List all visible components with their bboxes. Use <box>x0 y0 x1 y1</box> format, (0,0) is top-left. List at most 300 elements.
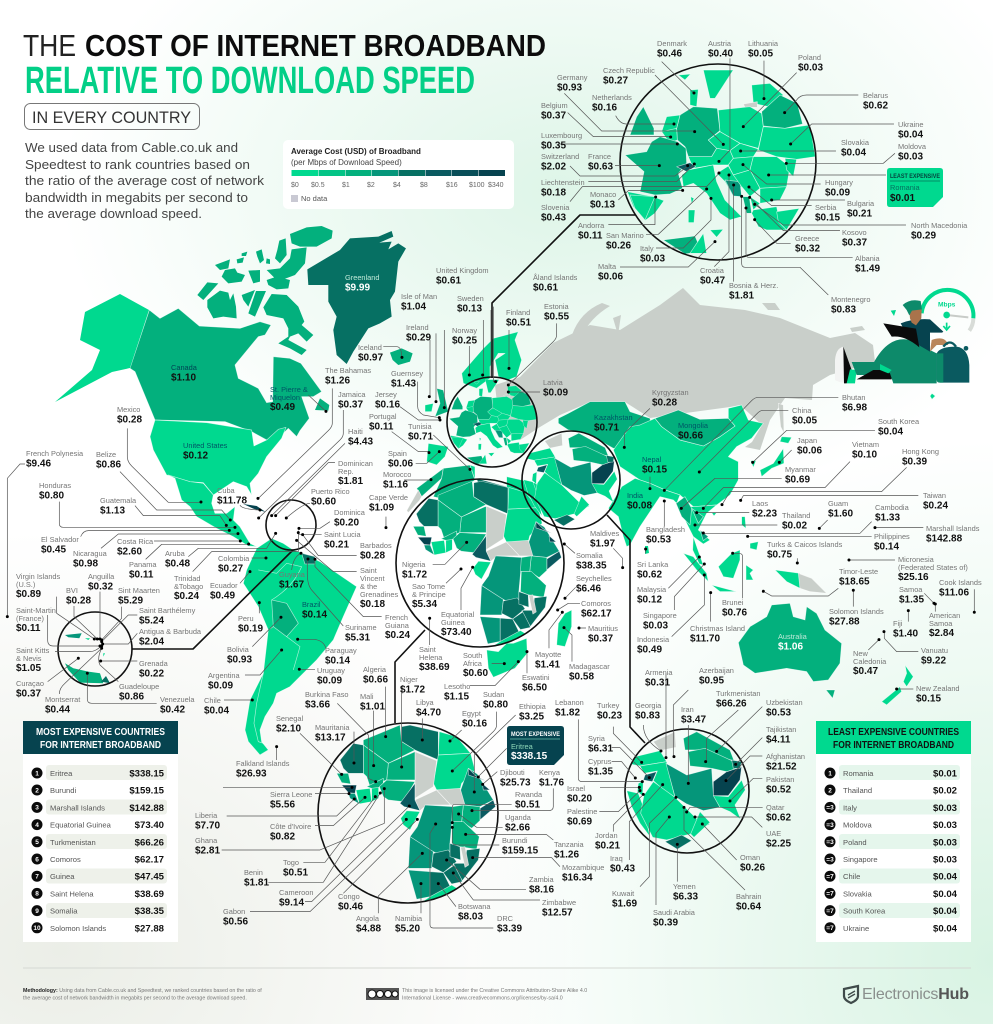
label: Saint Vincent and the Grenadines: Grenadines <box>360 590 399 599</box>
label: Cameroon: Cameroon <box>279 888 314 897</box>
label: Uruguay: Uruguay <box>317 666 345 675</box>
label: Peru: $0.19 <box>238 624 263 634</box>
label: China: China <box>792 406 811 415</box>
panel: most expensive countries table: $38.35 <box>135 906 165 917</box>
label: United Kingdom: $0.61 <box>436 276 461 286</box>
label: Zambia: $8.16 <box>529 884 554 896</box>
panel: least expensive countries table: =7 <box>826 874 834 880</box>
label: Uruguay: $0.09 <box>317 676 342 686</box>
label: American Samoa: American <box>929 611 960 620</box>
label: Italy: Italy <box>640 244 654 253</box>
label: Saudi Arabia: $0.39 <box>653 918 678 928</box>
label: Turkmenistan: $66.26 <box>716 698 747 710</box>
label: Thailand: Thailand <box>782 511 810 520</box>
label: Panama: Panama <box>129 560 157 569</box>
label: DRC: DRC <box>497 914 513 923</box>
label: New Caledonia: $0.47 <box>853 666 878 677</box>
panel: most expensive countries table: $27.88 <box>135 923 165 934</box>
panel: least expensive countries table: $0.04 <box>933 906 958 917</box>
label: Haiti: Haiti <box>348 427 363 436</box>
panel: most expensive countries table: Comoros <box>50 855 81 864</box>
label: Burundi: $159.15 <box>502 846 539 856</box>
label: Brazil: Brazil <box>302 600 320 609</box>
label: Cape Verde: $1.09 <box>369 502 394 514</box>
map: Northern Europe <box>462 332 522 388</box>
callout: most expensive Eritrea: $338.15 <box>511 751 548 762</box>
label: Montserrat: $0.44 <box>45 704 70 716</box>
label: Brunei: $0.76 <box>722 608 747 618</box>
label: Isle of Man: Isle of Man <box>401 292 437 301</box>
label: Singapore: Singapore <box>643 611 677 620</box>
label: Suriname: $5.31 <box>345 632 370 644</box>
label: Armenia: $0.31 <box>645 678 670 688</box>
label: Togo: $0.51 <box>283 868 308 878</box>
label: Bahrain: Bahrain <box>736 892 761 901</box>
label: Equatorial Guinea: Equatorial <box>441 610 474 619</box>
label: Seychelles: $6.46 <box>576 584 601 594</box>
label: Comoros: Comoros <box>581 599 611 608</box>
map: Middle East small <box>524 433 617 526</box>
label: Turks and Caicos Islands: Turks & Caicos Islands <box>767 540 842 549</box>
panel: least expensive countries table: =7 <box>826 891 834 898</box>
label: Syria: Syria <box>588 734 605 743</box>
label: Turkmenistan: Turkmenistan <box>716 689 760 698</box>
world map <box>55 226 935 755</box>
label: Rwanda: Rwanda <box>515 790 542 799</box>
label: Pakistan: $0.52 <box>766 784 791 796</box>
label: Uzbekistan: Uzbekistan <box>766 698 803 707</box>
label: Argentina: Argentina <box>208 671 240 680</box>
label: Ukraine: Ukraine <box>898 120 923 129</box>
label: Eswatini: $6.50 <box>522 682 547 694</box>
label: New Zealand: New Zealand <box>916 684 960 693</box>
panel: most expensive countries table: Saint Helena <box>50 889 94 898</box>
panel: most expensive countries table: Burundi <box>50 786 76 795</box>
logo: ElectronicsHub: ElectronicsHub <box>862 986 969 1003</box>
panel: most expensive countries table: 7 <box>35 874 39 880</box>
intro text <box>25 140 265 221</box>
label: Mali: $1.01 <box>360 702 385 712</box>
label: Guernsey: Guernsey <box>391 369 423 378</box>
label: Cote d'Ivoire: $0.82 <box>270 832 295 842</box>
label: Liechtenstein: $0.18 <box>541 188 566 198</box>
label: Liberia: Liberia <box>195 811 217 820</box>
label: Gabon: $0.56 <box>223 916 248 928</box>
label: Iraq: $0.43 <box>610 864 635 874</box>
label: Iraq: Iraq <box>610 854 623 863</box>
label: Guyana: Guyana <box>279 570 305 579</box>
label: Serbia: Serbia <box>815 203 836 212</box>
label: Kazakhstan: $0.71 <box>594 422 619 434</box>
label: Armenia: Armenia <box>645 668 673 677</box>
leader lines: Middle East inset <box>578 673 763 905</box>
panel: least expensive countries table <box>816 721 971 942</box>
label: Kyrgyzstan: $0.28 <box>652 398 677 408</box>
label: Sierra Leone: $5.56 <box>270 800 295 810</box>
panel: least expensive countries table: =7 <box>826 908 834 915</box>
panel: most expensive countries table: 1 <box>35 770 39 777</box>
panel: most expensive countries table: 10 <box>33 925 41 932</box>
label: South Africa: South <box>463 651 482 660</box>
label: Uganda: Uganda <box>505 813 531 822</box>
panel: most expensive countries table: Marshall Islands <box>50 803 105 812</box>
map: Alaska <box>55 294 149 402</box>
legend: $8 <box>420 182 428 189</box>
label: Denmark: $0.46 <box>657 48 682 60</box>
label: Seychelles: Seychelles <box>576 574 612 583</box>
label: Angola: Angola <box>356 914 379 923</box>
label: French Guiana: $0.24 <box>385 630 410 641</box>
label: Qatar: Qatar <box>766 803 784 812</box>
label: Switzerland: $2.02 <box>541 162 566 172</box>
legend <box>283 140 514 209</box>
label: DRC: $3.39 <box>497 924 522 934</box>
illustration: person with laptop and speed gauge <box>835 290 973 383</box>
label: BVI: BVI <box>66 586 78 595</box>
label: Senegal: Senegal <box>276 714 303 723</box>
label: Latvia: Latvia <box>543 378 563 387</box>
label: Canada: Canada <box>171 363 197 372</box>
map: Russia (no data) <box>495 288 875 450</box>
label: Anguilla: Anguilla <box>88 572 114 581</box>
label: Guyana: $1.67 <box>279 580 304 590</box>
label: Nicaragua: $0.98 <box>73 558 98 570</box>
label: Latvia: $0.09 <box>543 388 568 398</box>
leader lines: Africa and Western Europe <box>392 330 664 686</box>
map: Arctic Russian islands <box>572 303 865 336</box>
label: India: India <box>627 491 643 500</box>
intro text: the ratio of the average cost of network <box>25 173 265 188</box>
panel: most expensive countries table: 9 <box>35 908 39 915</box>
label: Nepal: Nepal <box>642 455 661 464</box>
map: Kazakhstan, Mongolia and Asia <box>558 402 652 448</box>
label: Trinidad and Tobago: $0.24 <box>174 591 199 602</box>
label: Angola: $4.88 <box>356 924 381 934</box>
label: Tunisia: Tunisia <box>408 422 432 431</box>
label: Finland: Finland <box>506 308 530 317</box>
label: Andorra: Andorra <box>578 221 604 230</box>
label: Bhutan: Bhutan <box>842 393 865 402</box>
label: Guatemala: $1.13 <box>100 506 125 516</box>
panel: most expensive countries table: 8 <box>35 891 39 898</box>
label: Portugal: Portugal <box>369 412 397 421</box>
label: New Caledonia: Caledonia <box>853 657 887 666</box>
label: Mauritania: Mauritania <box>315 723 350 732</box>
panel: most expensive countries table: $38.69 <box>135 889 164 900</box>
label: Christmas Island: Christmas Island <box>690 624 745 633</box>
label: Monaco: $0.13 <box>590 200 615 210</box>
label: Yemen: $6.33 <box>673 892 698 902</box>
label: Croatia: Croatia <box>700 266 724 275</box>
label: Morocco: $1.16 <box>383 480 408 490</box>
label: North Macedonia: North Macedonia <box>911 221 967 230</box>
label: Hong Kong: $0.39 <box>902 456 927 468</box>
panel: least expensive countries table: $0.03 <box>933 854 957 866</box>
label: Senegal: $2.10 <box>276 724 301 734</box>
label: Bolivia: $0.93 <box>227 654 252 666</box>
label: Spain: $0.06 <box>388 458 413 470</box>
panel: least expensive countries table: $0.03 <box>933 837 957 848</box>
label: Falkland Islands: Falkland Islands <box>236 759 289 768</box>
label: Jordan: Jordan <box>595 831 618 840</box>
label: Sri Lanka: $0.62 <box>637 570 662 580</box>
label: Slovakia: $0.04 <box>841 148 866 158</box>
heading: least expensive: LEAST EXPENSIVE COUNTRIES <box>828 726 959 738</box>
label: Philippines: Philippines <box>874 532 910 541</box>
label: Turks and Caicos Islands: $0.75 <box>767 550 792 560</box>
label: Isle of Man: $1.04 <box>401 302 426 312</box>
label: Virgin Islands: $0.89 <box>16 589 41 600</box>
panel: most expensive countries table: Equatorial Guinea <box>50 821 112 830</box>
label: Germany: $0.93 <box>557 82 582 94</box>
panel: most expensive countries table: $159.15 <box>129 786 165 796</box>
label: Dominican Republic: Rep. <box>338 467 354 476</box>
label: Vanuatu: Vanuatu <box>921 646 948 655</box>
label: Argentina: $0.09 <box>208 680 233 692</box>
panel: least expensive countries table: $0.02 <box>933 786 957 796</box>
label: Serbia: $0.15 <box>815 212 840 224</box>
panel: least expensive countries table: Moldova <box>843 821 872 830</box>
legend: $16 <box>446 182 458 189</box>
label: Eswatini: Eswatini <box>522 673 550 682</box>
label: Saint Lucia: $0.21 <box>324 540 349 550</box>
label: Ukraine: $0.04 <box>898 130 923 140</box>
label: Mozambique: $16.34 <box>562 872 593 884</box>
label: Botswana: $8.03 <box>458 912 483 922</box>
label: Azerbaijan: Azerbaijan <box>699 666 734 675</box>
label: Spain: Spain <box>388 449 407 458</box>
methodology <box>23 988 262 1002</box>
label: French Guiana: French <box>385 613 408 622</box>
panel: least expensive countries table: =3 <box>826 856 834 863</box>
label: Anguilla: $0.32 <box>88 582 113 592</box>
label: Lithuania: Lithuania <box>748 39 778 48</box>
label: Timor-Leste: $18.65 <box>839 576 870 588</box>
leader lines: Americas <box>7 347 402 760</box>
label: Hungary: Hungary <box>825 178 853 187</box>
label: Mozambique: Mozambique <box>562 863 604 872</box>
label: Ethiopia: Ethiopia <box>519 702 546 711</box>
map: Africa north and south edges <box>407 465 572 677</box>
callout: least expensive Romania: LEAST EXPENSIVE <box>890 173 940 180</box>
label: Japan: $0.06 <box>797 446 822 456</box>
label: Ireland: Ireland <box>406 323 429 332</box>
label: Iran: $3.47 <box>681 714 706 726</box>
intro text: the average download speed. <box>25 206 202 221</box>
label: Botswana: Botswana <box>458 902 490 911</box>
country labels: Asia and Oceania <box>590 388 982 704</box>
label: South Africa: Africa <box>463 659 483 668</box>
panel: least expensive countries table: South Korea <box>843 907 886 916</box>
label: Marshall Islands: Marshall Islands <box>926 524 979 533</box>
label: Monaco: Monaco <box>590 190 616 199</box>
panel: least expensive countries table: $0.04 <box>933 889 958 900</box>
methodology: the average cost of network bandwidth in megabits per second to the average download speed. <box>23 996 247 1002</box>
label: Sint Maarten: $5.29 <box>118 596 143 606</box>
inset: Europe <box>620 64 816 260</box>
label: Greece: $0.32 <box>795 244 820 254</box>
label: Philippines: $0.14 <box>874 542 899 552</box>
label: Albania: Albania <box>855 254 880 263</box>
label: Greenland: Greenland <box>345 273 380 282</box>
map: Africa small <box>413 481 561 648</box>
label: Malta: Malta <box>598 262 616 271</box>
heading: most expensive: MOST EXPENSIVE COUNTRIES <box>36 726 165 738</box>
label: Burkina Faso: Burkina Faso <box>305 690 349 699</box>
label: Mongolia: $0.66 <box>678 430 703 442</box>
label: Australia: Australia <box>778 632 807 641</box>
label: Colombia: $0.27 <box>218 564 243 574</box>
label: Dominica: Dominica <box>334 508 365 517</box>
label: Bhutan: $6.98 <box>842 402 867 414</box>
label: Saint Vincent and the Grenadines: & the <box>360 582 377 591</box>
label: Andorra: $0.11 <box>578 230 603 242</box>
label: Timor-Leste: Timor-Leste <box>839 567 878 576</box>
label: Puerto Rico: $0.60 <box>311 496 336 508</box>
label: Solomon Islands: $27.88 <box>829 616 860 628</box>
label: Malaysia: $0.12 <box>637 594 662 606</box>
label: Mongolia: Mongolia <box>678 421 708 430</box>
label: Panama: $0.11 <box>129 570 154 580</box>
label: Maldives: Maldives <box>590 529 619 538</box>
label: Maldives: $1.97 <box>590 538 615 550</box>
label: Sao Tome and Principe: Sao Tome <box>412 582 445 591</box>
label: Lesotho: $1.15 <box>444 692 469 702</box>
subtitle: RELATIVE TO DOWNLOAD SPEED <box>25 60 475 102</box>
panel: least expensive countries table: 2 <box>828 787 832 794</box>
license text: International License - www.creativecommons.org/licenses/by-sa/4.0 <box>402 996 563 1002</box>
label: UAE: $2.25 <box>766 838 791 850</box>
label: Sudan: $0.80 <box>483 700 508 710</box>
panel: least expensive countries table: Ukraine <box>843 924 869 933</box>
label: Laos: Laos <box>752 499 768 508</box>
label: French Polynesia: $9.46 <box>26 458 51 470</box>
label: Comoros: $62.17 <box>581 608 612 620</box>
label: Saint Kitts and Nevis: $1.05 <box>16 663 41 674</box>
icon: backpack <box>937 342 969 383</box>
label: Kazakhstan: Kazakhstan <box>594 413 633 422</box>
heading: most expensive <box>23 721 178 754</box>
label: Tajikistan: $4.11 <box>766 734 791 746</box>
label: North Macedonia: $0.29 <box>911 230 936 242</box>
panel: least expensive countries table: $0.04 <box>933 872 958 883</box>
label: Iran: Iran <box>681 705 694 714</box>
label: Guam: $1.60 <box>828 508 853 520</box>
label: El Salvador: El Salvador <box>41 535 79 544</box>
label: Palestine: $0.69 <box>567 816 592 828</box>
label: Antigua and Barbuda: Antigua & Barbuda <box>139 627 201 636</box>
label: Gabon: Gabon <box>223 907 245 916</box>
label: Australia: $1.06 <box>778 642 803 652</box>
label: Guatemala: Guatemala <box>100 496 136 505</box>
legend: $340 <box>488 182 504 189</box>
label: Lesotho: Lesotho <box>444 682 470 691</box>
label: Barbados: $0.28 <box>360 550 385 562</box>
inset: Caribbean <box>58 612 132 686</box>
label: Christmas Island: $11.70 <box>690 634 720 644</box>
label: Colombia: Colombia <box>218 554 249 563</box>
label: Paraguay: $0.14 <box>325 656 350 666</box>
panel: least expensive countries table: 1 <box>828 770 832 777</box>
label: Saint Lucia: Saint Lucia <box>324 530 361 539</box>
label: Sint Maarten: Sint Maarten <box>118 586 160 595</box>
label: El Salvador: $0.45 <box>41 544 66 556</box>
label: Togo: Togo <box>283 858 299 867</box>
label: Antigua and Barbuda: $2.04 <box>139 636 164 648</box>
panel: least expensive countries table: =3 <box>826 822 834 829</box>
label: Cambodia: $1.33 <box>875 512 900 524</box>
label: Czech Republic: Czech Republic <box>603 66 655 75</box>
label: Turkey: $0.23 <box>597 710 622 722</box>
label: Vietnam: Vietnam <box>852 440 879 449</box>
legend: $100 <box>469 182 485 189</box>
label: Burundi: Burundi <box>502 836 527 845</box>
callout: most expensive Eritrea: Eritrea <box>511 742 534 751</box>
label: Aruba: Aruba <box>165 549 185 558</box>
label: Oman: Oman <box>740 853 760 862</box>
panel: least expensive countries table: =3 <box>826 839 834 846</box>
label: Dominican Republic: $1.81 <box>338 476 363 487</box>
label: Haiti: $4.43 <box>348 436 373 448</box>
label: American Samoa: $2.84 <box>929 628 954 639</box>
label: Saint-Martin: $0.11 <box>16 623 41 634</box>
label: Peru: Peru <box>238 614 254 623</box>
panel: least expensive countries table: $0.03 <box>933 820 957 831</box>
label: Pakistan: Pakistan <box>766 775 794 784</box>
panel: most expensive countries table: $338.15 <box>129 768 165 780</box>
label: Ethiopia: $3.25 <box>519 712 544 722</box>
panel: most expensive countries table: Eritrea <box>50 769 73 778</box>
label: Bulgaria: Bulgaria <box>847 199 874 208</box>
label: St. Pierre and Miquelon: $0.49 <box>270 402 295 413</box>
intro text: We used data from Cable.co.uk and <box>25 140 238 155</box>
country labels: Americas <box>16 273 410 780</box>
label: Saint Helena: Saint <box>419 645 436 654</box>
label: South Africa: $0.60 <box>463 668 488 679</box>
label: Lebanon: Lebanon <box>555 698 584 707</box>
label: Cuba: $11.78 <box>217 496 247 506</box>
label: Germany: Germany <box>557 73 587 82</box>
panel: most expensive countries table: $142.88 <box>129 803 165 814</box>
tag: in every country <box>24 104 200 130</box>
label: The Bahamas: The Bahamas <box>325 366 371 375</box>
label: Montserrat: Montserrat <box>45 695 80 704</box>
label: Luxembourg: $0.35 <box>541 140 566 152</box>
label: Costa Rica: $2.60 <box>117 546 142 558</box>
label: Cambodia: Cambodia <box>875 503 909 512</box>
label: Georgia: $0.83 <box>635 710 660 722</box>
label: French Guiana: Guiana <box>385 621 410 630</box>
panel: most expensive countries table: 3 <box>35 805 39 812</box>
label: Bangladesh: Bangladesh <box>646 525 685 534</box>
label: Kosovo: Kosovo <box>842 228 867 237</box>
label: Cape Verde: Cape Verde <box>369 493 408 502</box>
label: Syria: $6.31 <box>588 744 613 754</box>
label: Montenegro: $0.83 <box>831 304 856 316</box>
label: Morocco: Morocco <box>383 470 411 479</box>
label: Guernsey: $1.43 <box>391 378 416 390</box>
label: Saint Vincent and the Grenadines: $0.18 <box>360 599 385 610</box>
label: Yemen: Yemen <box>673 882 696 891</box>
label: Chile: $0.04 <box>204 706 229 716</box>
callout: least expensive Romania <box>887 168 943 207</box>
panel: most expensive countries table: $47.45 <box>135 872 165 883</box>
legend: $1 <box>342 182 350 189</box>
label: Sudan: Sudan <box>483 690 504 699</box>
label: Luxembourg: Luxembourg <box>541 131 582 140</box>
label: United States: United States <box>183 441 227 450</box>
panel: most expensive countries table: 2 <box>35 787 39 794</box>
